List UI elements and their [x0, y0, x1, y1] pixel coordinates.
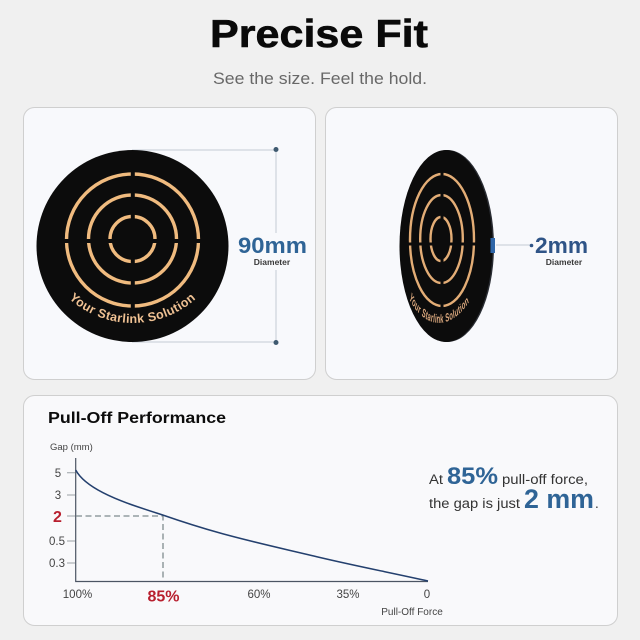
y axis labels: Gap (mm)	[50, 442, 93, 453]
panel: pull-off performance	[24, 396, 618, 626]
panel: side view thickness	[325, 107, 618, 380]
y axis labels: 0.3	[49, 558, 65, 570]
x axis labels: 100%	[63, 589, 92, 601]
x axis labels: 0	[424, 589, 430, 601]
dashed guides	[76, 516, 163, 581]
label: 90mm	[238, 233, 307, 267]
callout	[429, 463, 599, 514]
label: 90mm: Diameter	[254, 257, 291, 267]
panel: front view diameter	[23, 107, 316, 380]
thickness marker	[490, 238, 533, 253]
panel heading: Pull-Off Performance	[48, 410, 226, 427]
title: Precise Fit	[210, 13, 428, 56]
x axis labels: 85%	[147, 588, 180, 606]
x axis labels: 60%	[247, 589, 271, 601]
y axis labels: 5	[55, 468, 61, 480]
y axis labels	[49, 442, 93, 570]
label: 2mm: 2mm	[535, 233, 588, 258]
callout: the gap is just	[429, 496, 520, 511]
y axis labels: 3	[55, 490, 61, 502]
callout: .	[595, 496, 599, 511]
callout: pull-off force,	[502, 472, 588, 487]
front disc	[36, 150, 228, 342]
label: 90mm: 90mm	[238, 233, 307, 258]
y axis labels: 0.5	[49, 536, 65, 548]
axes and ticks	[67, 458, 428, 582]
callout: 2 mm	[524, 484, 594, 514]
label: 2mm: Diameter	[546, 257, 583, 267]
callout: 85%	[447, 463, 498, 490]
front disc: Your Starlink Solution	[71, 292, 196, 323]
x axis labels: 35%	[336, 589, 360, 601]
x axis labels	[63, 588, 443, 618]
x axis labels: Pull-Off Force	[381, 607, 443, 618]
callout: At	[429, 472, 443, 487]
y axis labels: 2	[53, 509, 62, 526]
side disc: Your Starlink Solution	[410, 292, 469, 323]
line chart	[49, 442, 443, 618]
curve	[76, 470, 428, 581]
dimension lines: 90mm	[132, 147, 278, 345]
subtitle: See the size. Feel the hold.	[213, 69, 427, 88]
side disc	[400, 150, 494, 342]
